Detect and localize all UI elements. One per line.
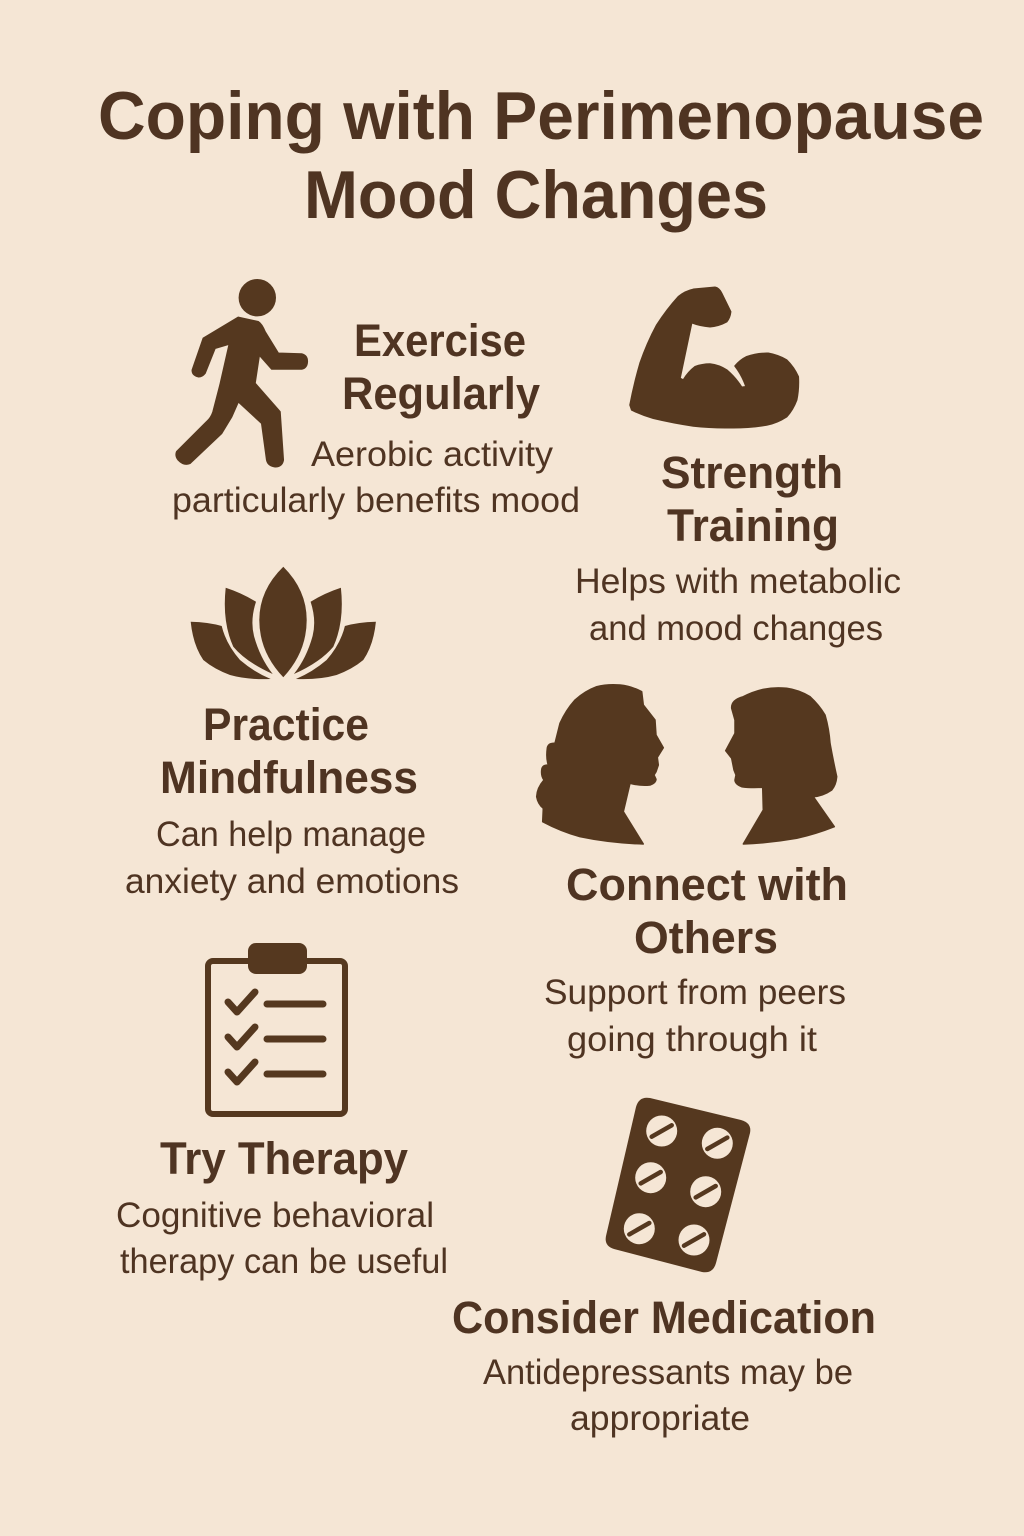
panel: connect with others: Others xyxy=(634,912,778,963)
icon: blister pack xyxy=(606,1098,750,1272)
panel: exercise regularly: particularly benefits mood xyxy=(172,481,580,520)
panel: connect with others: Support from peers xyxy=(544,973,846,1012)
title: Coping with Perimenopause xyxy=(98,78,984,154)
panel: connect with others: Connect with xyxy=(566,859,848,910)
panel: strength training: Training xyxy=(667,500,839,551)
panel: exercise regularly: Aerobic activity xyxy=(311,435,554,474)
icon: clipboard checklist xyxy=(208,943,345,1114)
panel: try therapy xyxy=(116,943,448,1281)
panel: try therapy: Try Therapy xyxy=(160,1133,408,1184)
icon: two women silhouettes xyxy=(537,685,837,844)
icon: lotus xyxy=(191,567,376,679)
panel: practice mindfulness: Mindfulness xyxy=(160,752,418,803)
panel: connect with others: going through it xyxy=(567,1020,817,1059)
panel: try therapy: therapy can be useful xyxy=(120,1242,448,1281)
panel: strength training: Strength xyxy=(661,447,843,498)
panel: connect with others xyxy=(537,685,848,1059)
panel: try therapy: Cognitive behavioral xyxy=(116,1196,434,1235)
panel: practice mindfulness: anxiety and emotions xyxy=(125,862,459,901)
panel: consider medication: Consider Medication xyxy=(452,1292,876,1343)
icon: flexed arm xyxy=(630,287,798,428)
panel: exercise regularly xyxy=(172,279,580,520)
icon: walking person xyxy=(176,279,307,467)
title: Mood Changes xyxy=(304,157,768,233)
panel: exercise regularly: Regularly xyxy=(342,368,540,419)
panel: exercise regularly: Exercise xyxy=(354,315,526,366)
panel: strength training: Helps with metabolic xyxy=(575,562,901,601)
panel: consider medication xyxy=(452,1098,876,1438)
panel: practice mindfulness: Practice xyxy=(203,699,369,750)
panel: strength training: and mood changes xyxy=(589,609,883,648)
panel: practice mindfulness xyxy=(125,567,459,901)
panel: consider medication: appropriate xyxy=(570,1399,750,1438)
panel: strength training xyxy=(575,287,901,648)
panel: practice mindfulness: Can help manage xyxy=(156,815,426,854)
panel: consider medication: Antidepressants may be xyxy=(483,1353,853,1392)
title xyxy=(98,78,984,233)
